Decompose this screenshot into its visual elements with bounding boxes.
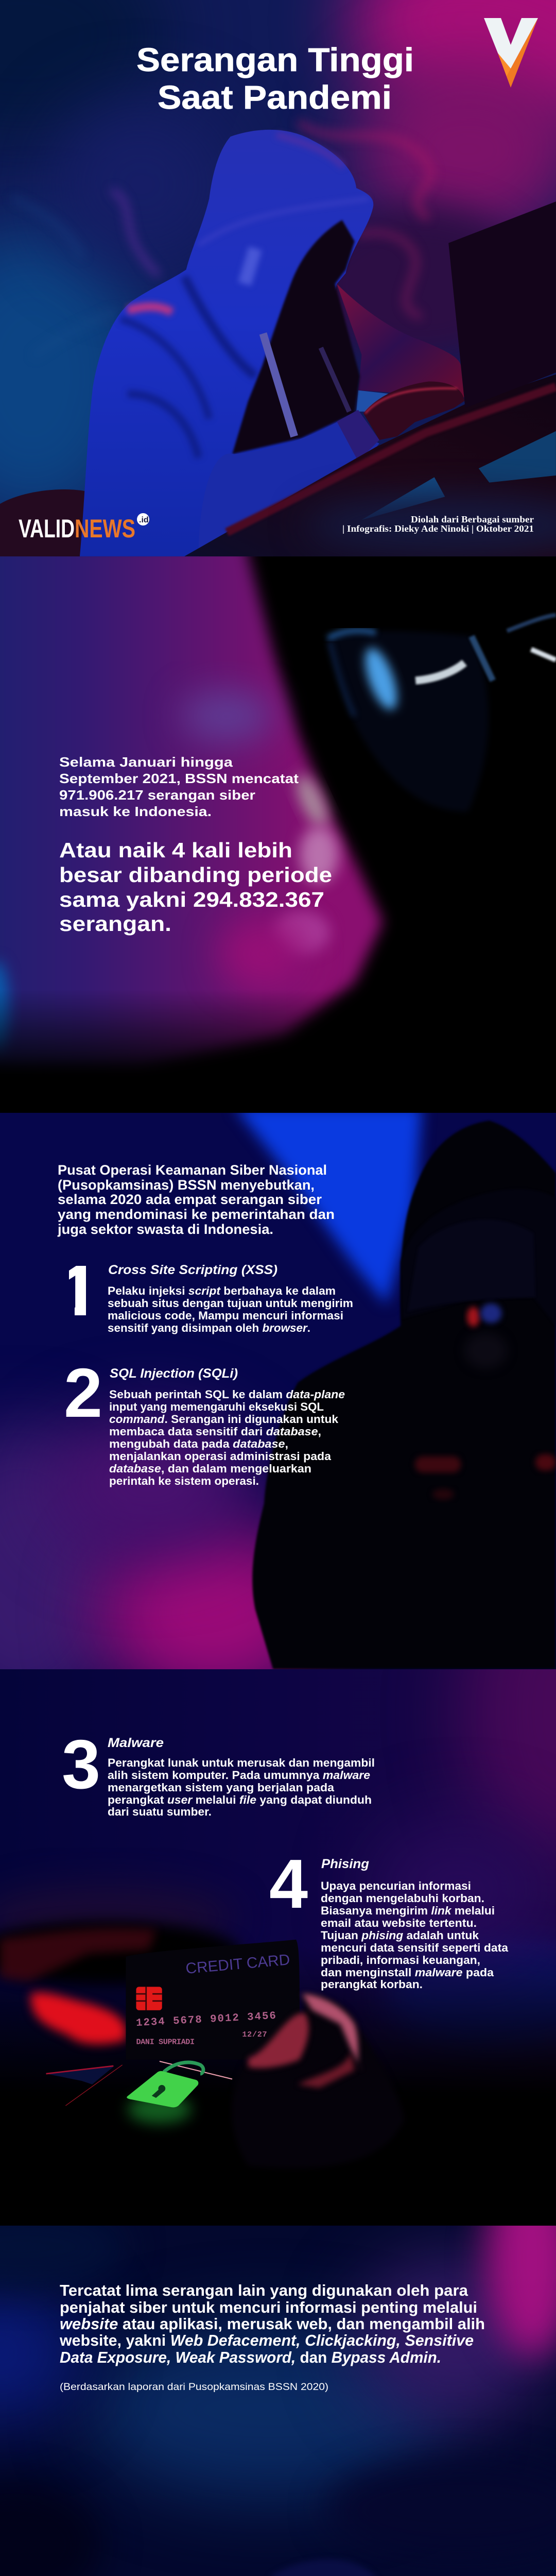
number 1: 1 xyxy=(59,1251,99,1331)
number 3: 3 xyxy=(62,1725,100,1803)
item: Cross Site Scripting xyxy=(108,1263,353,1334)
text: kenaikan serangan: serangan. xyxy=(59,912,171,936)
text: pengantar Pusopkamsinas xyxy=(57,1162,335,1237)
item: Phising: dan menginstall malware pada xyxy=(321,1966,494,1979)
text: pengantar Pusopkamsinas: yang mendominasi ke pemerintahan dan xyxy=(58,1207,335,1222)
text: lima serangan lain: website atau aplikasi, merusak web, dan mengambil alih xyxy=(60,2315,485,2333)
item: SQL Injection xyxy=(109,1366,345,1487)
credit card: CREDIT CARD xyxy=(185,1951,291,1977)
item: Cross Site Scripting: malicious code, Mampu mencuri informasi xyxy=(108,1309,343,1322)
hacker photo illustration xyxy=(0,0,556,556)
item: Phising: dengan mengelabuhi korban. xyxy=(321,1892,484,1905)
text: intro statistik xyxy=(59,754,299,819)
source credit xyxy=(342,514,534,534)
source credit: | Infografis: Dieky Ade Ninoki | Oktober 2021 xyxy=(342,523,534,534)
source credit: Diolah dari Berbagai sumber xyxy=(411,514,534,524)
item: SQL Injection: membaca data sensitif dari database, xyxy=(109,1425,321,1438)
panel: serangan 3 dan 4 xyxy=(0,1669,556,2226)
item: Malware xyxy=(108,1736,375,1818)
text: lima serangan lain: Data Exposure, Weak Password, dan Bypass Admin. xyxy=(60,2348,441,2366)
credit card: 1234 5678 9012 3456 xyxy=(136,2010,276,2029)
hand on keyboard photo illustration xyxy=(0,2158,556,2576)
logo: Validnews: VALID xyxy=(19,514,75,543)
credit card: DANI SUPRIADI xyxy=(136,2037,195,2046)
text: pengantar Pusopkamsinas: juga sektor swasta di Indonesia. xyxy=(57,1222,273,1237)
item: SQL Injection: database, dan dalam mengeluarkan xyxy=(109,1462,311,1475)
logo: Validnews: .id xyxy=(139,516,149,524)
item: Phising: email atau website tertentu. xyxy=(321,1917,477,1929)
item: SQL Injection: Sebuah perintah SQL ke dalam data-plane xyxy=(109,1388,345,1401)
title: Saat Pandemi xyxy=(158,79,392,116)
face with glasses photo illustration xyxy=(0,542,556,1113)
item: SQL Injection: command. Serangan ini digunakan untuk xyxy=(109,1413,339,1426)
text: pengantar Pusopkamsinas: selama 2020 ada empat serangan siber xyxy=(58,1192,322,1207)
panel: statistik serangan xyxy=(0,556,556,1067)
item: Malware: perangkat user melalui file yang dapat diunduh xyxy=(108,1793,372,1806)
text: lima serangan lain xyxy=(59,2281,485,2366)
item: Cross Site Scripting: sensitif yang disimpan oleh browser. xyxy=(108,1321,310,1334)
text: pengantar Pusopkamsinas: (Pusopkamsinas) BSSN menyebutkan, xyxy=(58,1177,315,1193)
item: SQL Injection: SQL Injection (SQLi) xyxy=(110,1366,238,1381)
item: Phising: Phising xyxy=(321,1857,369,1871)
item: Phising: Upaya pencurian informasi xyxy=(321,1879,471,1892)
item: Phising: pribadi, informasi keuangan, xyxy=(321,1954,480,1967)
item: Malware: alih sistem komputer. Pada umumnya malware xyxy=(108,1769,370,1782)
credit card: 12/27 xyxy=(242,2030,267,2039)
hooded silhouette photo illustration xyxy=(0,1106,556,1723)
text: intro statistik: Selama Januari hingga xyxy=(59,754,233,770)
text: intro statistik: 971.906.217 serangan siber xyxy=(59,787,255,803)
text: kenaikan serangan: sama yakni 294.832.367 xyxy=(59,888,324,911)
text: lima serangan lain: penjahat siber untuk mencuri informasi penting melalui xyxy=(60,2298,477,2316)
item: Phising: Tujuan phising adalah untuk xyxy=(321,1929,479,1942)
item: Phising: mencuri data sensitif seperti data xyxy=(321,1941,509,1954)
text: pengantar Pusopkamsinas: Pusat Operasi Keamanan Siber Nasional xyxy=(58,1162,327,1178)
credit card photo illustration xyxy=(0,1563,556,2226)
panel: serangan lain dan penutup xyxy=(0,2226,556,2576)
text: lima serangan lain: website, yakni Web Defacement, Clickjacking, Sensitive xyxy=(59,2331,474,2349)
item: Malware: dari suatu sumber. xyxy=(108,1805,212,1818)
item: Phising: Biasanya mengirim link melalui xyxy=(321,1904,495,1917)
item: Phising xyxy=(321,1857,509,1991)
item: Cross Site Scripting: sebuah situs dengan tujuan untuk mengirim xyxy=(108,1297,353,1310)
item: Malware: menargetkan sistem yang berjalan pada xyxy=(108,1781,335,1794)
text: intro statistik: masuk ke Indonesia. xyxy=(59,804,212,819)
title xyxy=(136,41,414,116)
item: Cross Site Scripting: Pelaku injeksi script berbahaya ke dalam xyxy=(108,1284,336,1297)
item: Malware: Malware xyxy=(108,1736,164,1750)
item: Cross Site Scripting: Cross Site Scripting (XSS) xyxy=(108,1263,277,1277)
item: SQL Injection: mengubah data pada database , xyxy=(109,1437,288,1450)
item: SQL Injection: perintah ke sistem operasi. xyxy=(109,1475,259,1487)
note: sumber laporan: (Berdasarkan laporan dari Pusopkamsinas BSSN 2020) xyxy=(60,2382,328,2393)
text: kenaikan serangan: Atau naik 4 kali lebih xyxy=(59,838,292,862)
text: kenaikan serangan: besar dibanding periode xyxy=(59,863,332,887)
number 2: 2 xyxy=(64,1354,102,1432)
text: lima serangan lain: Tercatat lima serangan lain yang digunakan oleh para xyxy=(60,2281,468,2299)
item: Malware: Perangkat lunak untuk merusak dan mengambil xyxy=(108,1756,375,1769)
icon: green padlock xyxy=(127,2062,203,2124)
item: Phising: perangkat korban. xyxy=(321,1978,423,1991)
panel: serangan 1 dan 2 xyxy=(0,1113,556,1669)
text: intro statistik: September 2021, BSSN mencatat xyxy=(59,771,299,786)
credit card xyxy=(126,1940,300,2060)
icon: V brand logo xyxy=(484,18,538,88)
item: SQL Injection: input yang memengaruhi eksekusi SQL xyxy=(109,1400,324,1413)
logo: Validnews: NEWS xyxy=(75,514,135,543)
item: SQL Injection: menjalankan operasi administrasi pada xyxy=(109,1450,332,1463)
number 4: 4 xyxy=(269,1845,308,1923)
logo: Validnews xyxy=(19,513,149,543)
title: Serangan Tinggi xyxy=(136,41,414,78)
text: kenaikan serangan xyxy=(59,838,332,936)
